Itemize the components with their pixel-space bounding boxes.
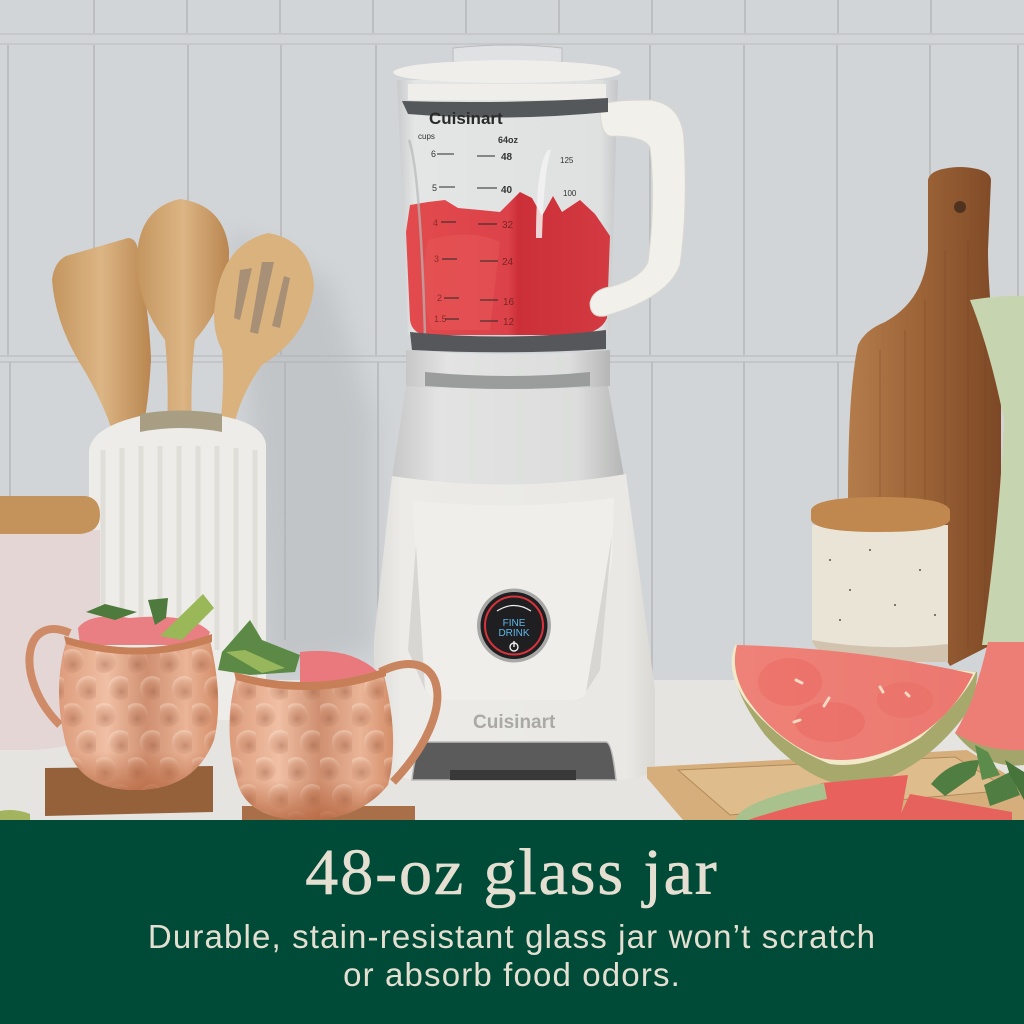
spatula	[52, 238, 151, 430]
jar markings: 6	[431, 149, 436, 159]
jar markings: 48	[501, 152, 513, 163]
control dial: FINE	[503, 618, 526, 629]
jar markings: 2	[437, 293, 442, 303]
jar glass	[397, 80, 618, 335]
copper mug right	[218, 620, 437, 821]
jar inner highlights	[408, 84, 606, 100]
jar markings	[418, 109, 577, 328]
jar markings: cups	[418, 132, 435, 141]
subtext: or absorb food odors.	[343, 956, 681, 993]
jar markings: 3	[434, 254, 439, 264]
silver shoulder	[392, 386, 624, 487]
wooden spoon	[137, 199, 229, 432]
wall shadows	[230, 230, 375, 680]
jar markings: 100	[563, 189, 577, 198]
counter	[0, 680, 1024, 820]
jar markings: 16	[503, 297, 515, 308]
watermelon wedge	[732, 645, 977, 787]
jar markings: 64oz	[498, 135, 519, 145]
jar handle	[590, 100, 685, 316]
jar markings: 24	[502, 257, 514, 268]
subtext: Durable, stain-resistant glass jar won’t scratch	[148, 918, 876, 955]
jar markings: 5	[432, 183, 437, 193]
watermelon slices on tray	[736, 775, 1012, 820]
speckled jar	[811, 497, 950, 664]
glass rib	[536, 150, 551, 238]
jar markings: 4	[433, 218, 438, 228]
coaster right	[242, 806, 415, 820]
green rind fragment	[0, 810, 30, 820]
caption banner	[0, 820, 1024, 1024]
control dial: DRINK	[498, 628, 530, 639]
wooden tray	[647, 750, 1024, 820]
control panel recess	[412, 498, 614, 700]
jar markings: 125	[560, 156, 574, 165]
mint	[931, 745, 1024, 806]
jar markings: 1.5	[434, 314, 447, 324]
jar dark band	[402, 98, 608, 118]
jar markings: Cuisinart	[429, 109, 503, 128]
watermelon right	[955, 642, 1024, 766]
subtext	[148, 918, 876, 993]
crock	[89, 416, 266, 720]
cutting board	[848, 167, 1001, 666]
green pitcher	[970, 296, 1024, 645]
brand on base: Cuisinart	[473, 712, 556, 733]
tile wall	[0, 0, 1024, 690]
jar markings: 40	[501, 185, 513, 196]
canister with wood lid	[0, 496, 100, 750]
lid	[453, 45, 562, 62]
control dial	[477, 588, 551, 662]
copper mug left	[29, 594, 230, 795]
motor base	[374, 474, 655, 780]
heading: 48-oz glass jar	[305, 836, 719, 909]
blender	[374, 45, 685, 780]
collar	[410, 330, 606, 352]
red blended drink	[406, 192, 610, 335]
feet	[412, 742, 616, 780]
lower collar	[406, 350, 610, 392]
jar markings: 32	[502, 220, 514, 231]
jar markings: 12	[503, 317, 515, 328]
coaster left	[45, 766, 213, 816]
slotted spoon	[214, 233, 314, 430]
wooden utensils and white crock	[52, 199, 314, 720]
